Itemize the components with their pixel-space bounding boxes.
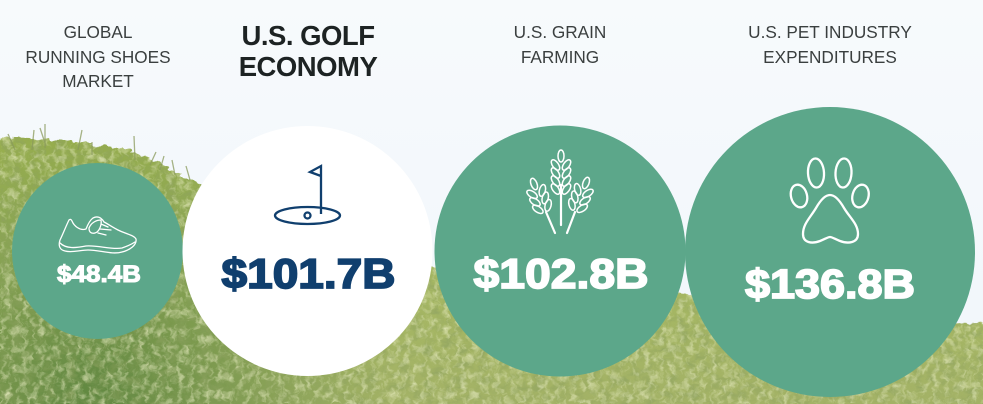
icon: shoe bbox=[59, 217, 136, 253]
icon: wheat bbox=[521, 150, 599, 233]
value: $101.7B bbox=[222, 250, 396, 297]
circle: pet industry bbox=[685, 107, 975, 397]
circle: grain farming bbox=[434, 126, 686, 376]
label: grain farming: U.S. GRAIN bbox=[514, 22, 606, 42]
label: running shoes: RUNNING SHOES bbox=[25, 46, 171, 66]
label: grain farming bbox=[514, 22, 606, 66]
wheat ear: centre bbox=[550, 150, 572, 196]
value: $48.4B bbox=[57, 261, 141, 288]
label: pet industry: EXPENDITURES bbox=[763, 46, 897, 66]
label: grain farming: FARMING bbox=[521, 46, 599, 66]
wheat ear: right bbox=[564, 173, 599, 217]
label: running shoes bbox=[25, 22, 171, 91]
icon: paw bbox=[788, 158, 871, 243]
label: running shoes: GLOBAL bbox=[64, 22, 132, 42]
label: pet industry: U.S. PET INDUSTRY bbox=[748, 22, 912, 42]
grass hill base bbox=[0, 144, 983, 404]
heading: U.S. golf economy: ECONOMY bbox=[239, 51, 377, 82]
circle: golf economy bbox=[182, 126, 432, 376]
label: pet industry bbox=[748, 22, 912, 66]
circle: running shoes bbox=[12, 163, 183, 339]
heading: U.S. golf economy: U.S. GOLF bbox=[242, 20, 374, 51]
wheat ear: left bbox=[521, 174, 556, 218]
icon: golf flag and hole bbox=[275, 166, 340, 224]
grass blades on the skyline bbox=[8, 124, 190, 180]
label: running shoes: MARKET bbox=[62, 71, 134, 91]
value: $102.8B bbox=[474, 250, 648, 297]
grass hill texture bbox=[0, 138, 983, 404]
heading: U.S. golf economy bbox=[239, 20, 378, 82]
value: $136.8B bbox=[745, 261, 915, 307]
